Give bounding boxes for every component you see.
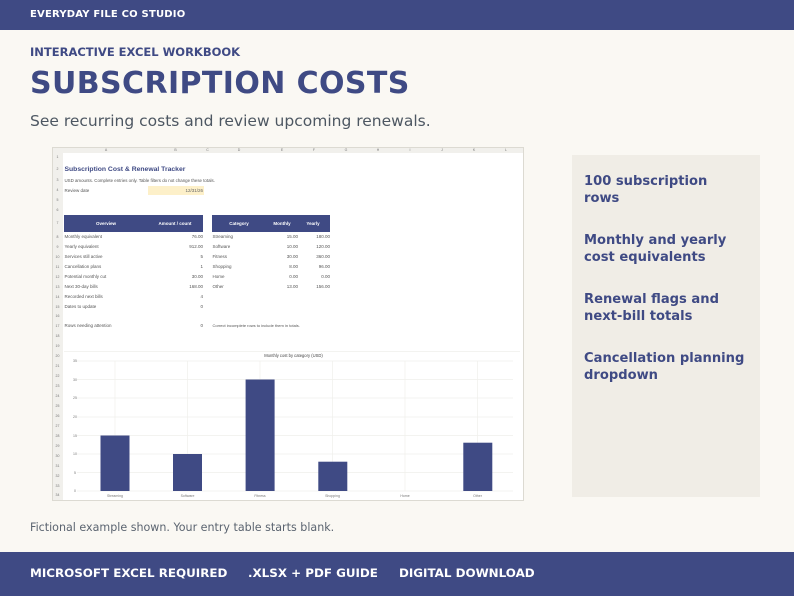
chart axis labels: 35 — [73, 359, 77, 363]
category table: Streaming — [212, 234, 233, 239]
category table: Other — [212, 284, 224, 289]
row numbers: 23 — [56, 384, 59, 388]
category table: 156.00 — [316, 284, 330, 289]
row numbers: 11 — [56, 265, 59, 269]
sheet title: Subscription Cost & Renewal Tracker — [64, 166, 185, 173]
column letters — [104, 148, 507, 152]
chart axis labels: 0 — [74, 489, 76, 493]
overview table — [64, 215, 203, 328]
column letters: B — [174, 148, 177, 152]
row numbers: 16 — [56, 314, 59, 318]
chart axis labels: Fitness — [254, 494, 266, 498]
row numbers: 30 — [56, 454, 59, 458]
review date field: Review date — [64, 188, 89, 192]
row numbers: 3 — [57, 178, 58, 182]
overview table: Monthly equivalent — [64, 234, 102, 239]
column letters: E — [281, 148, 283, 152]
feature: cancellation planning: Cancellation planning — [584, 351, 744, 366]
row numbers: 17 — [56, 324, 59, 328]
row numbers: 4 — [57, 188, 58, 192]
chart axis labels: Shopping — [325, 494, 340, 498]
bottom banner: MICROSOFT EXCEL REQUIRED — [30, 566, 227, 580]
row numbers: 32 — [56, 474, 59, 478]
category table — [212, 215, 330, 328]
chart axis labels: Streaming — [107, 494, 123, 498]
row numbers: 18 — [56, 334, 59, 338]
column letters: D — [238, 148, 240, 152]
top banner: EVERYDAY FILE CO STUDIO — [30, 9, 185, 20]
overview table: 5 — [200, 254, 203, 259]
review date field — [64, 186, 204, 195]
overview table: Dates to update — [64, 304, 96, 309]
feature: renewal flags: next-bill totals — [584, 309, 692, 324]
overview table: 912.00 — [189, 244, 203, 249]
overview table: Cancellation plans — [64, 264, 101, 269]
chart axis labels: 5 — [74, 470, 76, 474]
feature: cancellation planning: dropdown — [584, 368, 658, 383]
row numbers: 12 — [56, 275, 59, 279]
spreadsheet column header strip — [53, 148, 523, 153]
column letters: J — [441, 148, 443, 152]
row numbers: 27 — [56, 424, 59, 428]
category table: Software — [212, 244, 230, 249]
row numbers: 5 — [57, 198, 58, 202]
category table: Category — [229, 220, 249, 226]
feature: renewal flags: Renewal flags and — [584, 292, 719, 307]
chart axis labels: Other — [473, 494, 482, 498]
row numbers: 13 — [56, 285, 59, 289]
row numbers: 33 — [56, 484, 59, 488]
column letters: I — [410, 148, 411, 152]
category table: 30.00 — [287, 254, 298, 259]
overview table: Rows needing attention — [64, 323, 112, 328]
eyebrow heading: INTERACTIVE EXCEL WORKBOOK — [30, 45, 240, 59]
chart axis labels: Software — [181, 494, 194, 498]
row numbers: 6 — [57, 208, 58, 212]
overview table: Potential monthly cut — [64, 274, 106, 279]
column letters: H — [377, 148, 379, 152]
overview table: Yearly equivalent — [64, 244, 99, 249]
feature: cancellation planning — [584, 351, 744, 383]
bottom banner: DIGITAL DOWNLOAD — [399, 566, 535, 580]
top banner — [0, 0, 794, 30]
overview table: Amount / count — [158, 220, 192, 226]
row numbers: 25 — [56, 404, 59, 408]
category table: 360.00 — [316, 254, 330, 259]
category table: Monthly — [273, 220, 291, 226]
feature: renewal flags — [584, 292, 719, 324]
row numbers: 7 — [57, 221, 58, 225]
category table: 13.00 — [287, 284, 298, 289]
overview table: Services still active — [64, 254, 103, 259]
category table: Home — [212, 274, 225, 279]
column letters: A — [105, 148, 107, 152]
bar chart: monthly cost by category — [64, 351, 520, 498]
chart axis labels: 30 — [73, 378, 77, 382]
row numbers: 22 — [56, 374, 59, 378]
chart axis labels: 25 — [73, 396, 77, 400]
category table: 10.00 — [287, 244, 298, 249]
overview table: 76.00 — [192, 234, 203, 239]
row numbers: 21 — [56, 364, 59, 368]
chart title: Monthly cost by category (USD) — [264, 353, 323, 358]
column letters: G — [345, 148, 347, 152]
category table: Yearly — [306, 220, 320, 226]
feature: cost equivalents: Monthly and yearly — [584, 233, 726, 248]
row numbers: 28 — [56, 434, 59, 438]
row numbers: 34 — [56, 493, 59, 497]
chart axis labels — [73, 359, 482, 498]
panel: features — [572, 155, 760, 497]
feature: cost equivalents — [584, 233, 726, 265]
chart axis labels: 15 — [73, 434, 77, 438]
category table: Fitness — [212, 254, 227, 259]
overview table: 1 — [200, 264, 203, 269]
chart axis labels: 20 — [73, 415, 77, 419]
panel: spreadsheet screenshot — [52, 147, 524, 501]
bottom banner: .XLSX + PDF GUIDE — [248, 566, 378, 580]
footnote: Fictional example shown. Your entry table starts blank. — [30, 521, 334, 534]
category table: 8.00 — [289, 264, 298, 269]
row numbers — [56, 155, 60, 497]
overview table: 0 — [200, 323, 203, 328]
overview table: 4 — [200, 294, 203, 299]
category table: 180.00 — [316, 234, 330, 239]
row numbers: 14 — [56, 295, 59, 299]
category table: Shopping — [212, 264, 232, 269]
category table: 96.00 — [319, 264, 330, 269]
bottom banner — [0, 552, 794, 596]
row numbers: 31 — [56, 464, 59, 468]
row numbers: 20 — [56, 354, 59, 358]
review date field: 12/31/26 — [185, 188, 203, 192]
row numbers: 24 — [56, 394, 59, 398]
category table: 0.00 — [321, 274, 330, 279]
overview table: 168.00 — [189, 284, 203, 289]
overview table: Next 30-day bills — [64, 284, 98, 289]
column letters: C — [206, 148, 209, 152]
chart axis labels: Home — [400, 494, 410, 498]
feature: subscription rows: rows — [584, 191, 619, 206]
row numbers: 8 — [57, 235, 58, 239]
sheet note: USD amounts. Complete entries only. Table filters do not change these totals. — [64, 178, 215, 183]
row numbers: 19 — [56, 344, 59, 348]
feature: subscription rows: 100 subscription — [584, 174, 707, 189]
overview table: 0 — [200, 304, 203, 309]
overview table: Recorded next bills — [64, 294, 103, 299]
column letters: F — [313, 148, 315, 152]
column letters: K — [473, 148, 475, 152]
subtitle: See recurring costs and review upcoming renewals. — [30, 112, 431, 130]
spreadsheet row header strip — [53, 153, 63, 500]
overview table: Overview — [96, 220, 116, 226]
row numbers: 15 — [56, 305, 59, 309]
category table: 0.00 — [289, 274, 298, 279]
overview table: 30.00 — [192, 274, 203, 279]
feature: cost equivalents: cost equivalents — [584, 250, 706, 265]
row numbers: 29 — [56, 444, 59, 448]
title: SUBSCRIPTION COSTS — [30, 66, 410, 101]
row numbers: 1 — [57, 155, 58, 159]
category table: 15.00 — [287, 234, 298, 239]
chart axis labels: 10 — [73, 452, 77, 456]
category table: Correct incomplete rows to include them in totals. — [212, 323, 300, 328]
feature: subscription rows — [584, 174, 707, 206]
row numbers: 26 — [56, 414, 59, 418]
row numbers: 9 — [57, 245, 58, 249]
column letters: L — [505, 148, 507, 152]
category table: 120.00 — [316, 244, 330, 249]
row numbers: 2 — [57, 167, 58, 171]
row numbers: 10 — [56, 255, 59, 259]
